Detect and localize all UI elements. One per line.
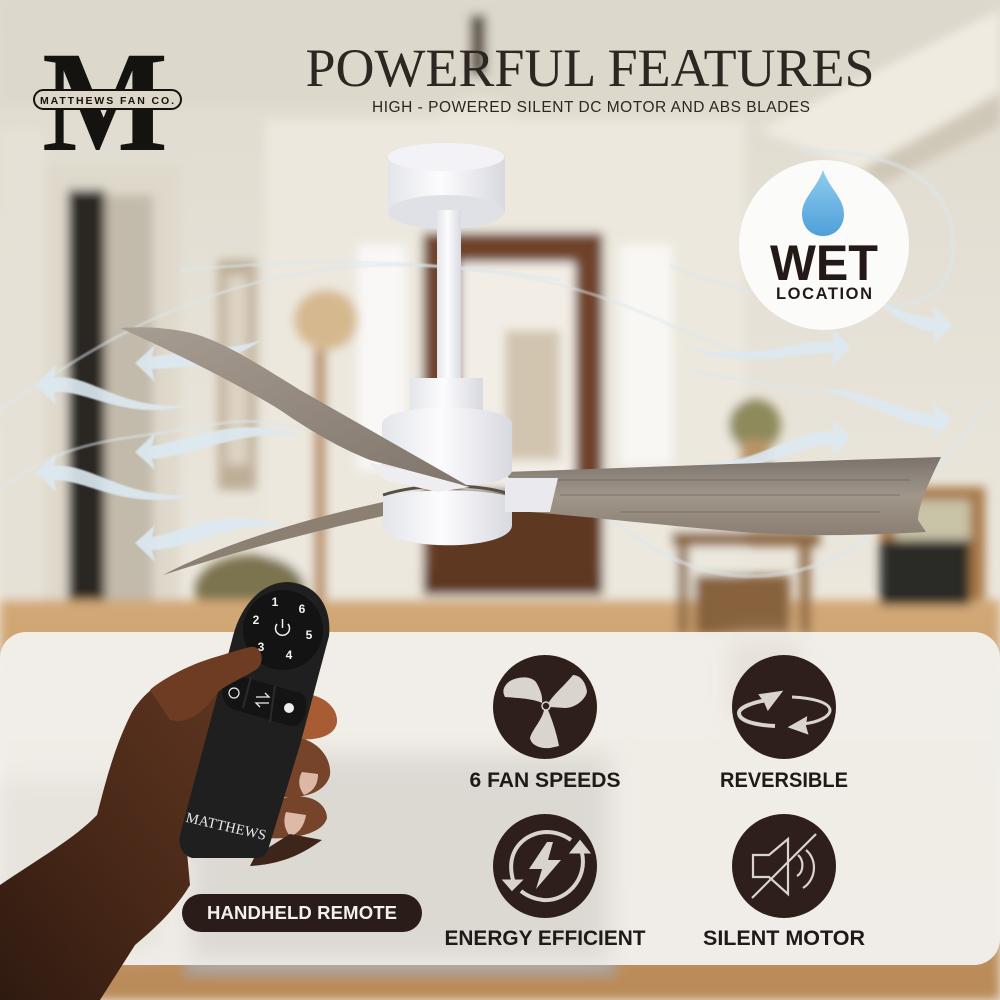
feature: silent motor xyxy=(703,814,865,950)
remote control xyxy=(180,582,329,858)
label: ENERGY EFFICIENT xyxy=(444,926,646,950)
feature: reversible xyxy=(720,655,848,792)
feature: energy efficient xyxy=(444,814,646,950)
fan: lower left blade xyxy=(163,502,383,575)
fan: blade bracket xyxy=(368,462,470,492)
icon: water drop xyxy=(802,170,844,236)
subtitle: HIGH - POWERED SILENT DC MOTOR AND ABS BLADES xyxy=(372,99,810,116)
wet location badge xyxy=(739,160,909,330)
feature: 6 fan speeds xyxy=(470,655,620,792)
speed numbers: 4 xyxy=(286,648,293,662)
icon: fan xyxy=(493,655,597,759)
fan: canopy xyxy=(388,143,505,229)
icon: rotation arrows xyxy=(732,655,836,759)
label: SILENT MOTOR xyxy=(703,926,865,950)
fan: upper left blade xyxy=(120,327,470,487)
title: POWERFUL FEATURES xyxy=(306,38,874,98)
speed numbers: 3 xyxy=(258,640,265,654)
fan: downrod xyxy=(437,210,461,382)
handheld remote pill: HANDHELD REMOTE xyxy=(207,902,397,923)
icon: muted speaker xyxy=(732,814,836,918)
fan: right blade xyxy=(505,457,941,535)
speed numbers xyxy=(253,595,313,662)
speed numbers: 2 xyxy=(253,613,260,627)
remote buttons xyxy=(222,675,306,726)
handheld remote pill xyxy=(182,894,422,932)
logo: MATTHEWS FAN CO. xyxy=(40,95,174,107)
label: REVERSIBLE xyxy=(720,768,848,792)
translucent lower panel xyxy=(0,632,1000,965)
thumb over remote xyxy=(150,647,262,721)
fan: motor housing xyxy=(382,378,558,545)
airflow: right arrows xyxy=(680,300,953,468)
hand holding remote: back fingers and palm xyxy=(0,648,337,1000)
remote brand: MATTHEWS xyxy=(184,810,268,844)
label: 6 FAN SPEEDS xyxy=(470,768,620,792)
location label: LOCATION xyxy=(776,285,872,303)
speed numbers: 6 xyxy=(299,602,306,616)
icon: energy cycle xyxy=(493,814,597,918)
remote dial xyxy=(243,590,323,670)
airflow: wisps xyxy=(0,150,990,576)
speed numbers: 5 xyxy=(306,628,313,642)
power icon xyxy=(276,619,290,635)
airflow: left arrows xyxy=(36,340,300,562)
speed numbers: 1 xyxy=(272,595,279,609)
logo: M xyxy=(42,23,168,182)
wet label: WET xyxy=(770,235,878,291)
